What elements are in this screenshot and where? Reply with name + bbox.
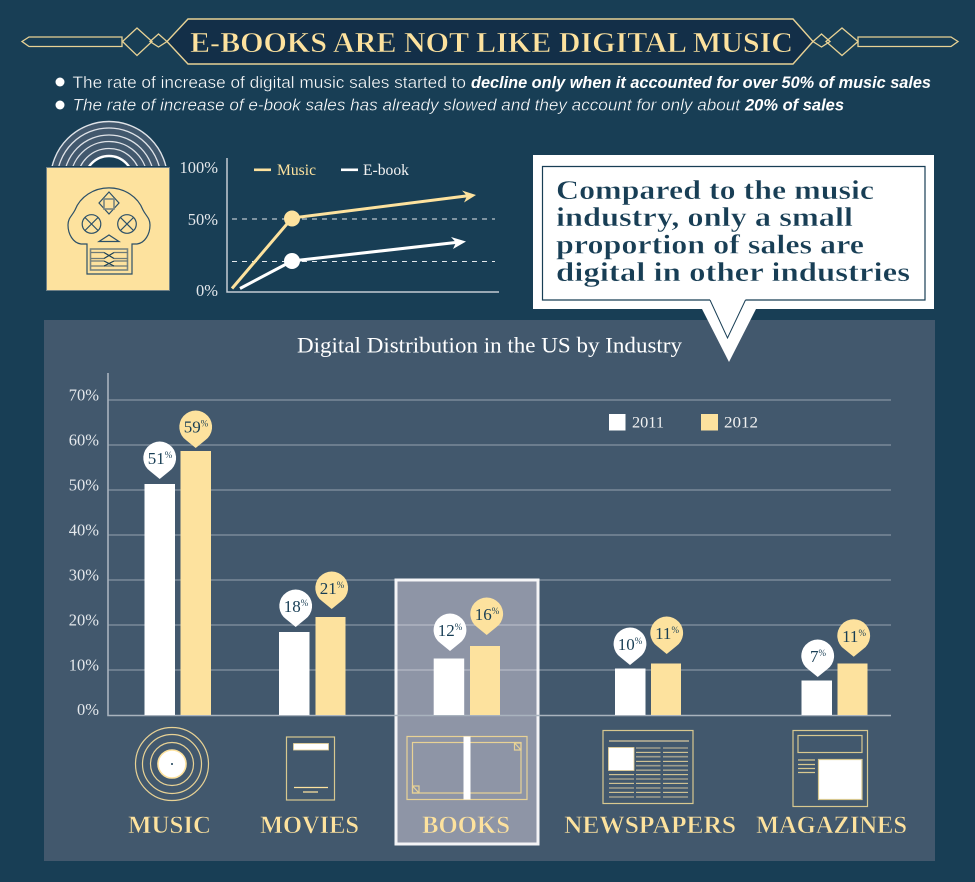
industry labels: MAGAZINES	[756, 810, 907, 839]
bullet text block: 20% of sales	[744, 96, 844, 114]
title banner: E-BOOKS ARE NOT LIKE DIGITAL MUSIC	[190, 27, 793, 59]
y axis labels: 10%	[69, 656, 99, 674]
y axis labels	[69, 386, 99, 719]
bars: movies: %	[337, 580, 345, 590]
bullet text block: decline only when it accounted for over 50% of music sales	[471, 73, 931, 92]
y axis labels: 40%	[69, 520, 99, 540]
bars: magazines	[801, 619, 870, 715]
industry labels	[128, 810, 907, 839]
chart title: Digital Distribution in the US by Industry	[297, 332, 682, 358]
chart legend	[254, 162, 409, 179]
title banner	[22, 19, 958, 64]
industry labels: NEWSPAPERS	[564, 810, 736, 839]
callout	[533, 155, 934, 362]
y axis labels: 70%	[69, 386, 99, 404]
bars: magazines: %	[858, 628, 866, 638]
bars: newspapers: 10	[618, 635, 635, 654]
y axis labels: 0%	[196, 281, 218, 300]
bars: movies: 21	[320, 579, 337, 598]
industry labels: MUSIC	[128, 810, 211, 839]
bars: newspapers: %	[635, 636, 643, 646]
icon: record album with skull	[46, 122, 170, 290]
bars: newspapers: 11	[655, 624, 671, 643]
bars: books: %	[455, 622, 463, 632]
y axis labels: 60%	[69, 430, 99, 450]
bars: newspapers: %	[671, 625, 679, 635]
bullet text block: The rate of increase of e-book sales has already slowed and they account for only about	[72, 96, 741, 114]
bars: movies: 18	[284, 597, 301, 616]
bars: books	[434, 598, 503, 715]
callout: digital in other industries	[556, 257, 910, 287]
chart legend: 2011	[632, 414, 664, 432]
y axis labels: 50%	[69, 476, 99, 494]
bars: music: %	[165, 450, 173, 460]
icon: open book	[407, 736, 527, 800]
industry labels: MOVIES	[260, 810, 359, 839]
icon: newspaper	[603, 730, 693, 804]
y axis labels: 100%	[180, 158, 218, 177]
icon: magazine	[793, 730, 868, 806]
y axis labels: 0%	[77, 700, 99, 719]
y axis labels: 30%	[69, 566, 99, 584]
bars: magazines: %	[818, 648, 826, 658]
chart legend: Music	[277, 162, 316, 179]
e-book line	[240, 237, 466, 288]
bars: movies	[279, 572, 348, 715]
bars: books: %	[492, 606, 500, 616]
chart legend: 2012	[724, 414, 758, 432]
line chart: music vs e-book	[180, 158, 499, 300]
grid and axes	[108, 373, 891, 716]
industry labels: BOOKS	[422, 810, 510, 839]
chart legend	[609, 414, 758, 432]
bars: music: 51	[148, 449, 165, 468]
music line	[232, 190, 476, 288]
bars: books: 16	[475, 605, 492, 624]
bars: music: 59	[184, 418, 201, 436]
bullet text block: The rate of increase of digital music sales started to	[72, 73, 466, 92]
chart legend: E-book	[363, 162, 409, 179]
bars: books: 12	[438, 621, 455, 640]
bars: magazines: 7	[810, 647, 818, 666]
bars: music: %	[201, 418, 209, 428]
callout: proportion of sales are	[556, 230, 864, 260]
bars: newspapers	[614, 617, 683, 715]
panel: digital distribution by industry	[44, 320, 935, 861]
chart axes	[227, 158, 499, 292]
icon: music record	[136, 728, 208, 800]
bars: movies: %	[301, 598, 309, 608]
y axis labels: 50%	[188, 210, 218, 229]
bullet text block	[56, 73, 931, 114]
bars: magazines: 11	[842, 627, 858, 646]
callout: Compared to the music	[556, 175, 874, 205]
bars: music	[143, 411, 212, 715]
icon: movies case	[286, 737, 334, 800]
y axis labels: 20%	[69, 610, 99, 630]
callout: industry, only a small	[556, 202, 854, 232]
books highlight box	[396, 580, 538, 844]
y axis labels	[180, 158, 218, 300]
